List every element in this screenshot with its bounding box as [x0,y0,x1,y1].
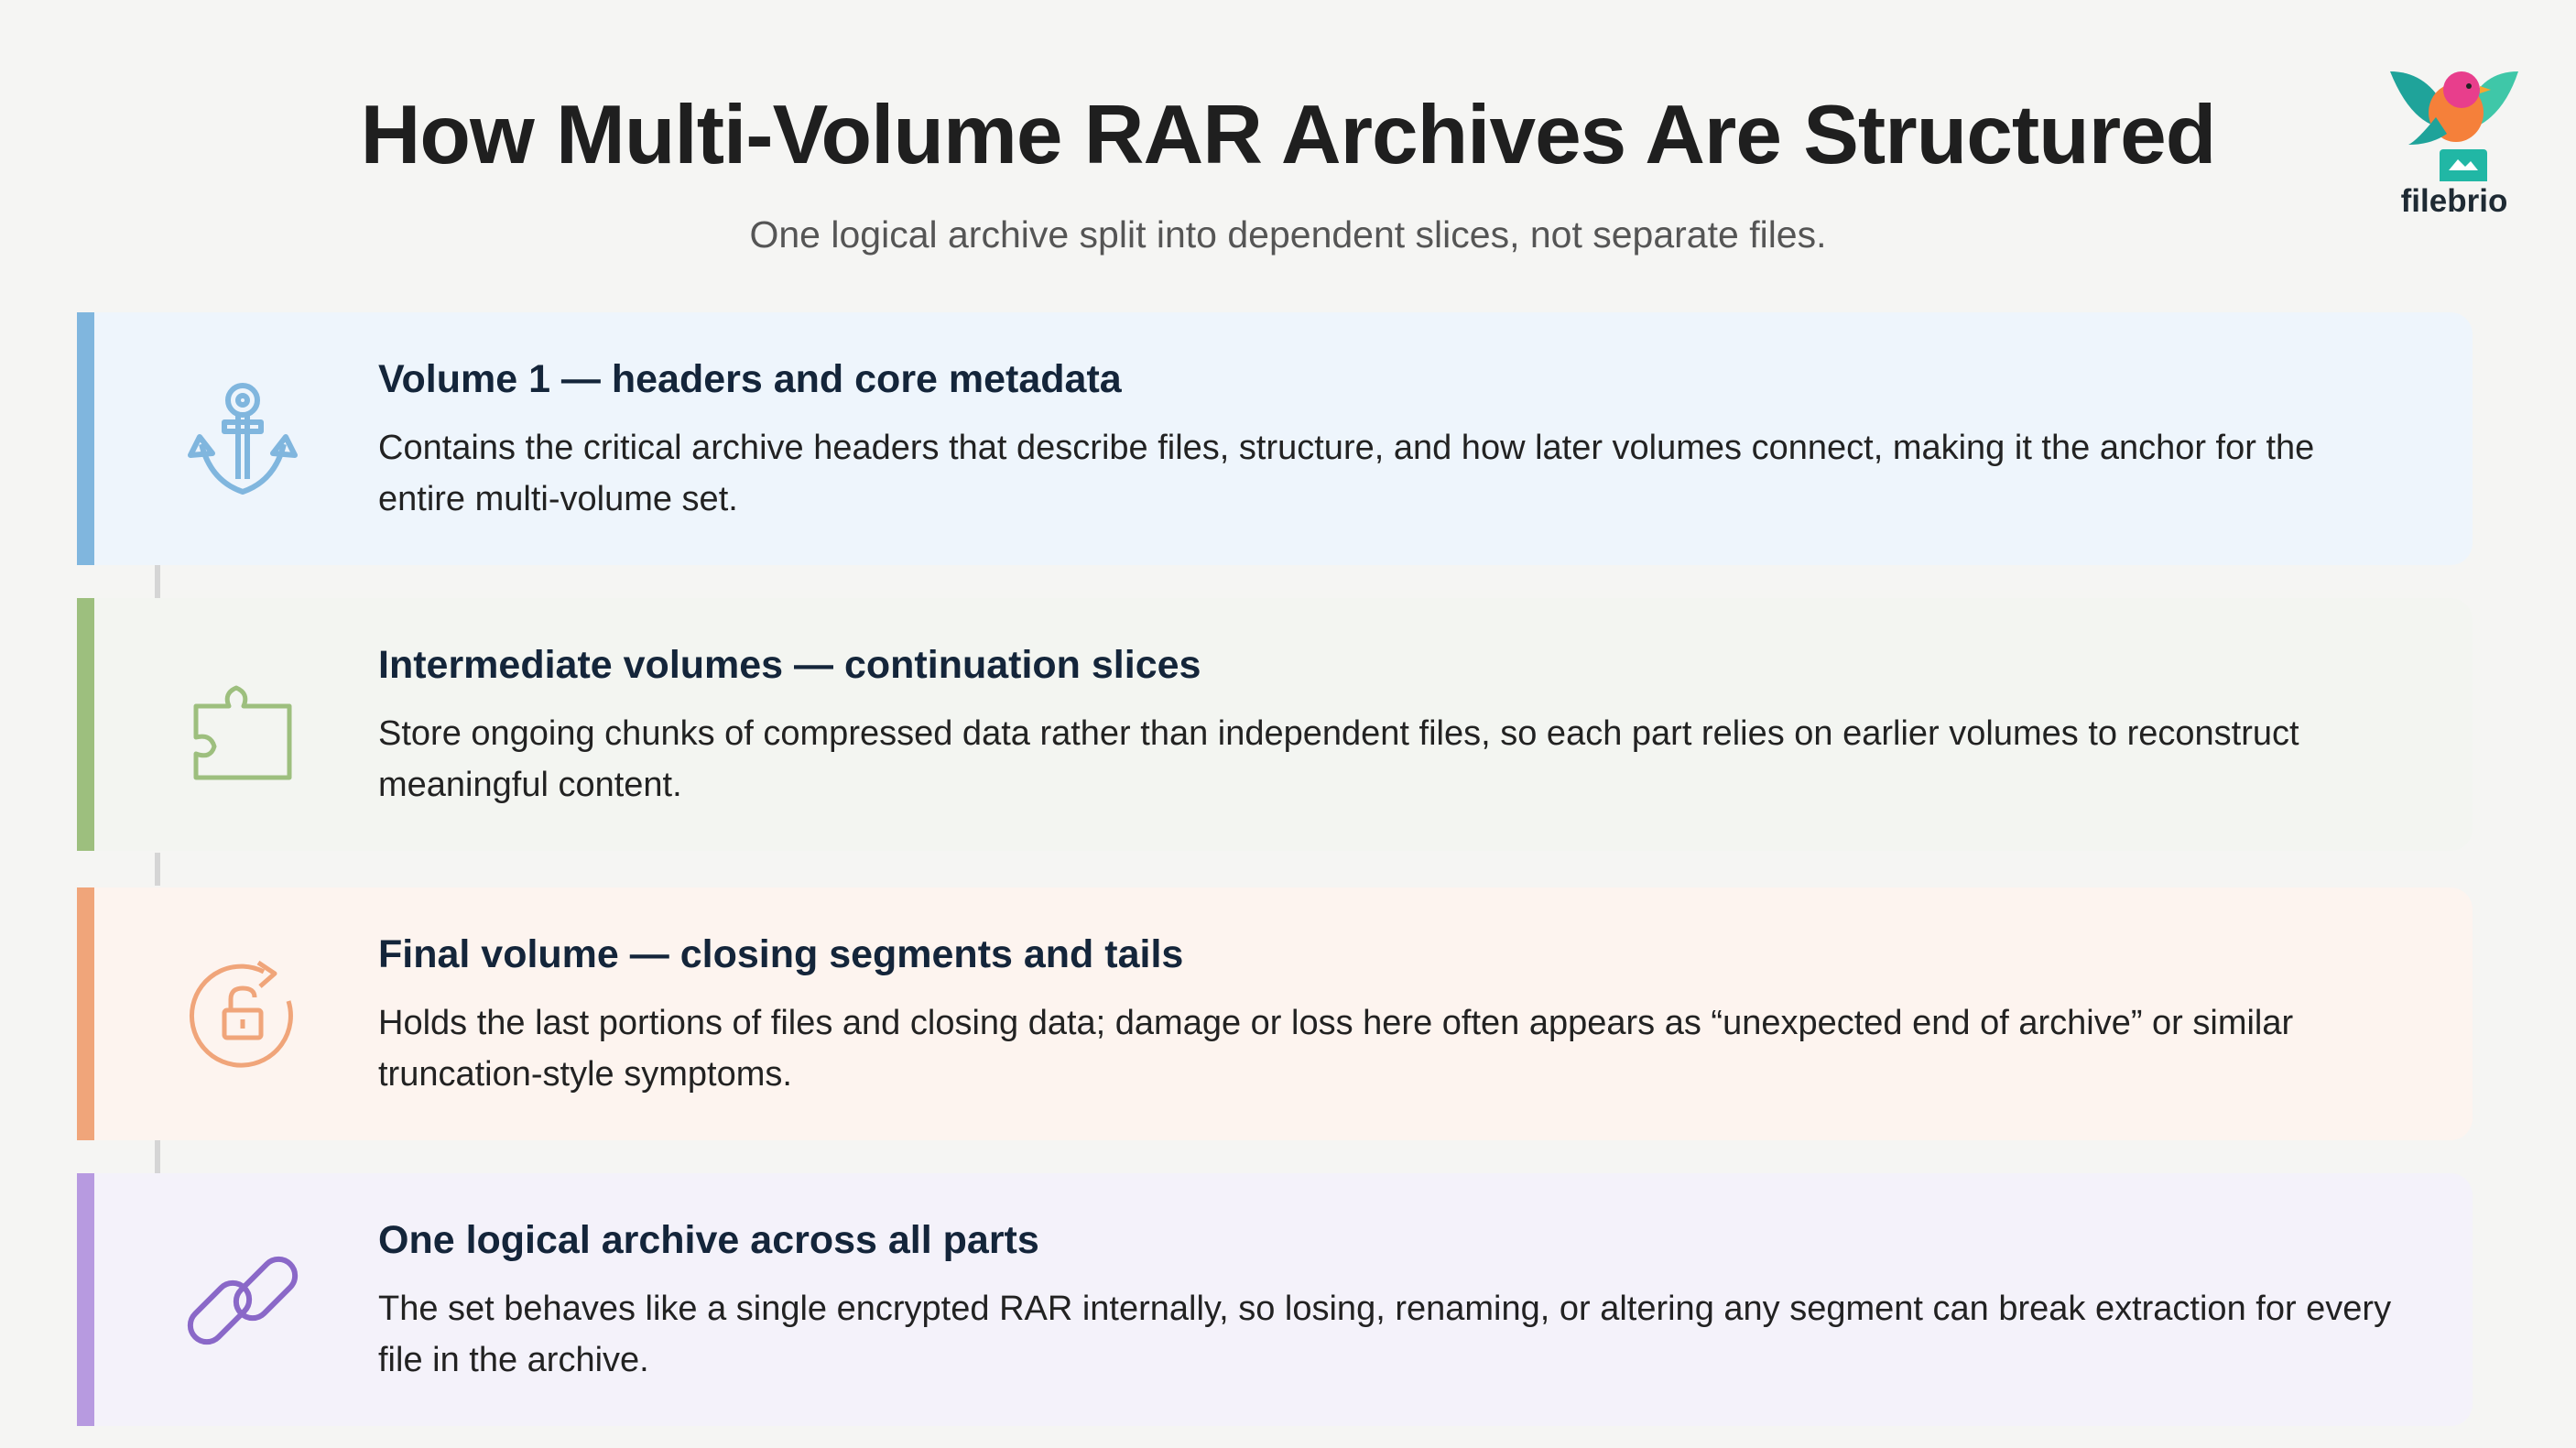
body text: Store ongoing chunks of compressed data rather than independent files, so each part relies on earlier volumes to reconstruct [378,714,2299,753]
panel: intermediate volumes [77,598,2299,851]
body text [378,429,2314,518]
body text [378,1290,2391,1379]
heading: Intermediate volumes — continuation slices [378,643,1201,687]
body text [378,714,2299,804]
title: How Multi-Volume RAR Archives Are Structured [361,89,2215,181]
logo: filebrio [2401,183,2507,219]
panel: one logical archive [77,1173,2391,1426]
logo [2390,71,2518,219]
icon: anchor [188,383,298,495]
heading: One logical archive across all parts [378,1218,1039,1262]
body text: Contains the critical archive headers that describe files, structure, and how later volumes connect, making it the anchor for the [378,429,2314,467]
icon: chain link [187,1257,299,1345]
body text [378,1004,2293,1094]
body text: file in the archive. [378,1341,649,1379]
body text: The set behaves like a single encrypted RAR internally, so losing, renaming, or altering any segment can break extraction for every [378,1290,2391,1328]
panel: final volume [77,887,2293,1140]
subtitle: One logical archive split into dependent slices, not separate files. [749,213,1826,256]
panel: volume 1 [77,312,2473,565]
heading: Final volume — closing segments and tails [378,932,1183,976]
heading: Volume 1 — headers and core metadata [378,357,1122,401]
body text: entire multi-volume set. [378,480,738,518]
body text: meaningful content. [378,766,682,804]
body text: Holds the last portions of files and closing data; damage or loss here often appears as “unexpected end of archive” or similar [378,1004,2293,1042]
body text: truncation-style symptoms. [378,1055,792,1094]
icon: puzzle [194,685,291,780]
icon: unlock refresh [189,961,293,1068]
